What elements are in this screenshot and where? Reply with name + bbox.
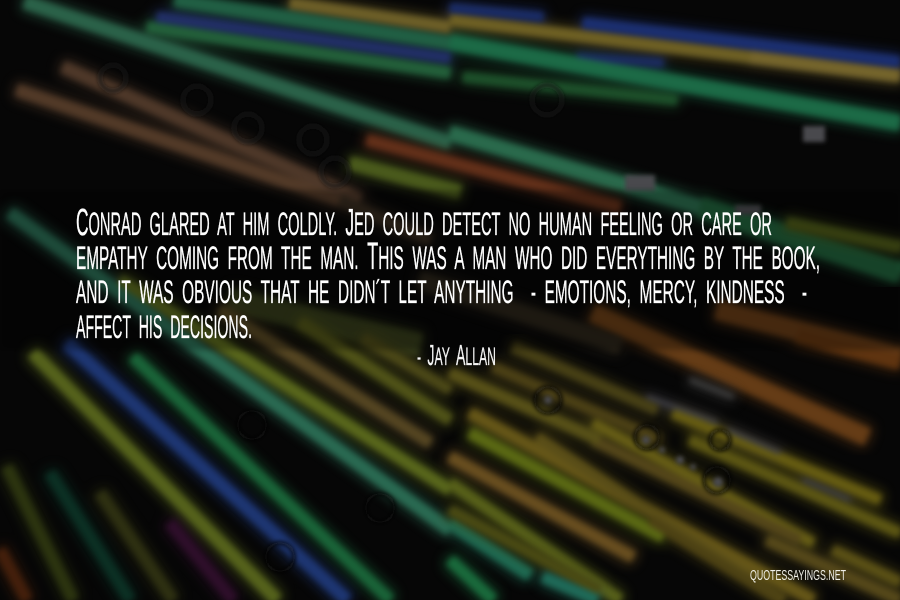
rods: bottom left (0, 213, 620, 600)
rods: brown and orange band (17, 67, 900, 437)
quote text: AFFECT HIS DECISIONS. (76, 309, 252, 345)
guide ring highlights (544, 126, 825, 487)
quote text (76, 202, 820, 345)
rods: top band (25, 0, 900, 273)
rods: bottom right (450, 347, 900, 600)
soft dark overlay behind quote (0, 190, 900, 350)
rod guide rings (100, 65, 730, 571)
author attribution: - JAY ALLAN (417, 340, 496, 372)
